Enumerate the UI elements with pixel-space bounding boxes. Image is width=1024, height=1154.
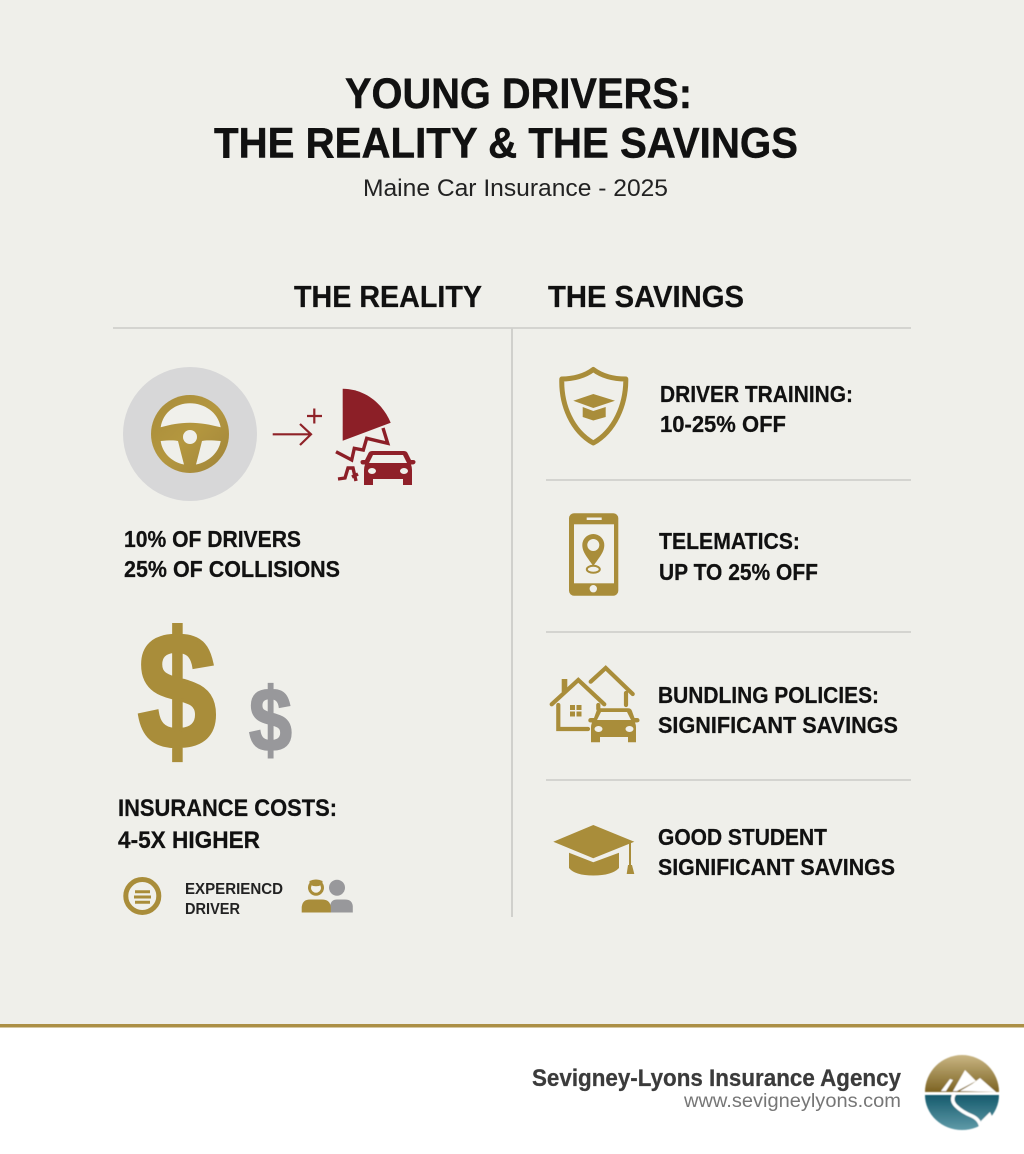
text: good student xyxy=(658,824,895,880)
stat: insurance costs xyxy=(118,795,337,854)
legend label: experienced driver: EXPERIENCD xyxy=(185,881,283,898)
panel: the savings xyxy=(552,370,898,880)
text: driver training xyxy=(660,381,853,437)
legend label: experienced driver: DRIVER xyxy=(185,901,240,918)
title xyxy=(214,70,798,168)
stat: collisions: 25% OF COLLISIONS xyxy=(124,556,340,582)
logo xyxy=(925,1055,999,1130)
title: THE REALITY & THE SAVINGS xyxy=(214,120,798,168)
panel: the reality xyxy=(118,367,416,918)
text: telematics: TELEMATICS: xyxy=(659,528,800,554)
icon: phone with pin xyxy=(569,513,618,596)
row: bundling xyxy=(552,668,898,742)
text: driver training: DRIVER TRAINING: xyxy=(660,381,853,407)
text: bundling: BUNDLING POLICIES: xyxy=(658,682,879,708)
stat: insurance costs: INSURANCE COSTS: xyxy=(118,795,337,822)
text: good student: GOOD STUDENT xyxy=(658,824,827,850)
row: good student xyxy=(553,824,895,880)
text: driver training: 10-25% OFF xyxy=(660,411,786,437)
stat: collisions: 10% OF DRIVERS xyxy=(124,526,301,552)
subtitle: Maine Car Insurance - 2025 xyxy=(363,175,668,202)
icon: graduation cap xyxy=(553,825,634,876)
footer company name: Sevigney-Lyons Insurance Agency xyxy=(532,1065,902,1092)
text: bundling: SIGNIFICANT SAVINGS xyxy=(658,712,898,738)
icon: gold badge xyxy=(126,880,159,912)
row: driver training xyxy=(562,370,853,443)
icon: shield with cap xyxy=(562,370,626,443)
stat: insurance costs: 4-5X HIGHER xyxy=(118,827,260,854)
heading: the savings: THE SAVINGS xyxy=(548,279,744,314)
icon: gold dollar: $ xyxy=(138,598,217,783)
icon: grey dollar: $ xyxy=(249,669,292,770)
text: telematics xyxy=(659,528,818,585)
stat: collisions xyxy=(124,526,340,582)
footer url: www.sevigneylyons.com xyxy=(683,1091,901,1112)
icon: people xyxy=(302,880,353,912)
legend label: experienced driver xyxy=(185,881,283,918)
icon: pie share and collision car xyxy=(336,389,416,485)
icon: steering wheel xyxy=(123,367,257,501)
text: good student: SIGNIFICANT SAVINGS xyxy=(658,854,895,880)
heading: the reality: THE REALITY xyxy=(294,279,482,314)
arrow with plus xyxy=(273,408,322,445)
row: telematics xyxy=(569,513,818,596)
title: YOUNG DRIVERS: xyxy=(345,70,692,118)
icon: houses and car xyxy=(552,668,640,742)
footer xyxy=(0,1024,1024,1154)
text: telematics: UP TO 25% OFF xyxy=(659,559,818,585)
text: bundling xyxy=(658,682,898,738)
